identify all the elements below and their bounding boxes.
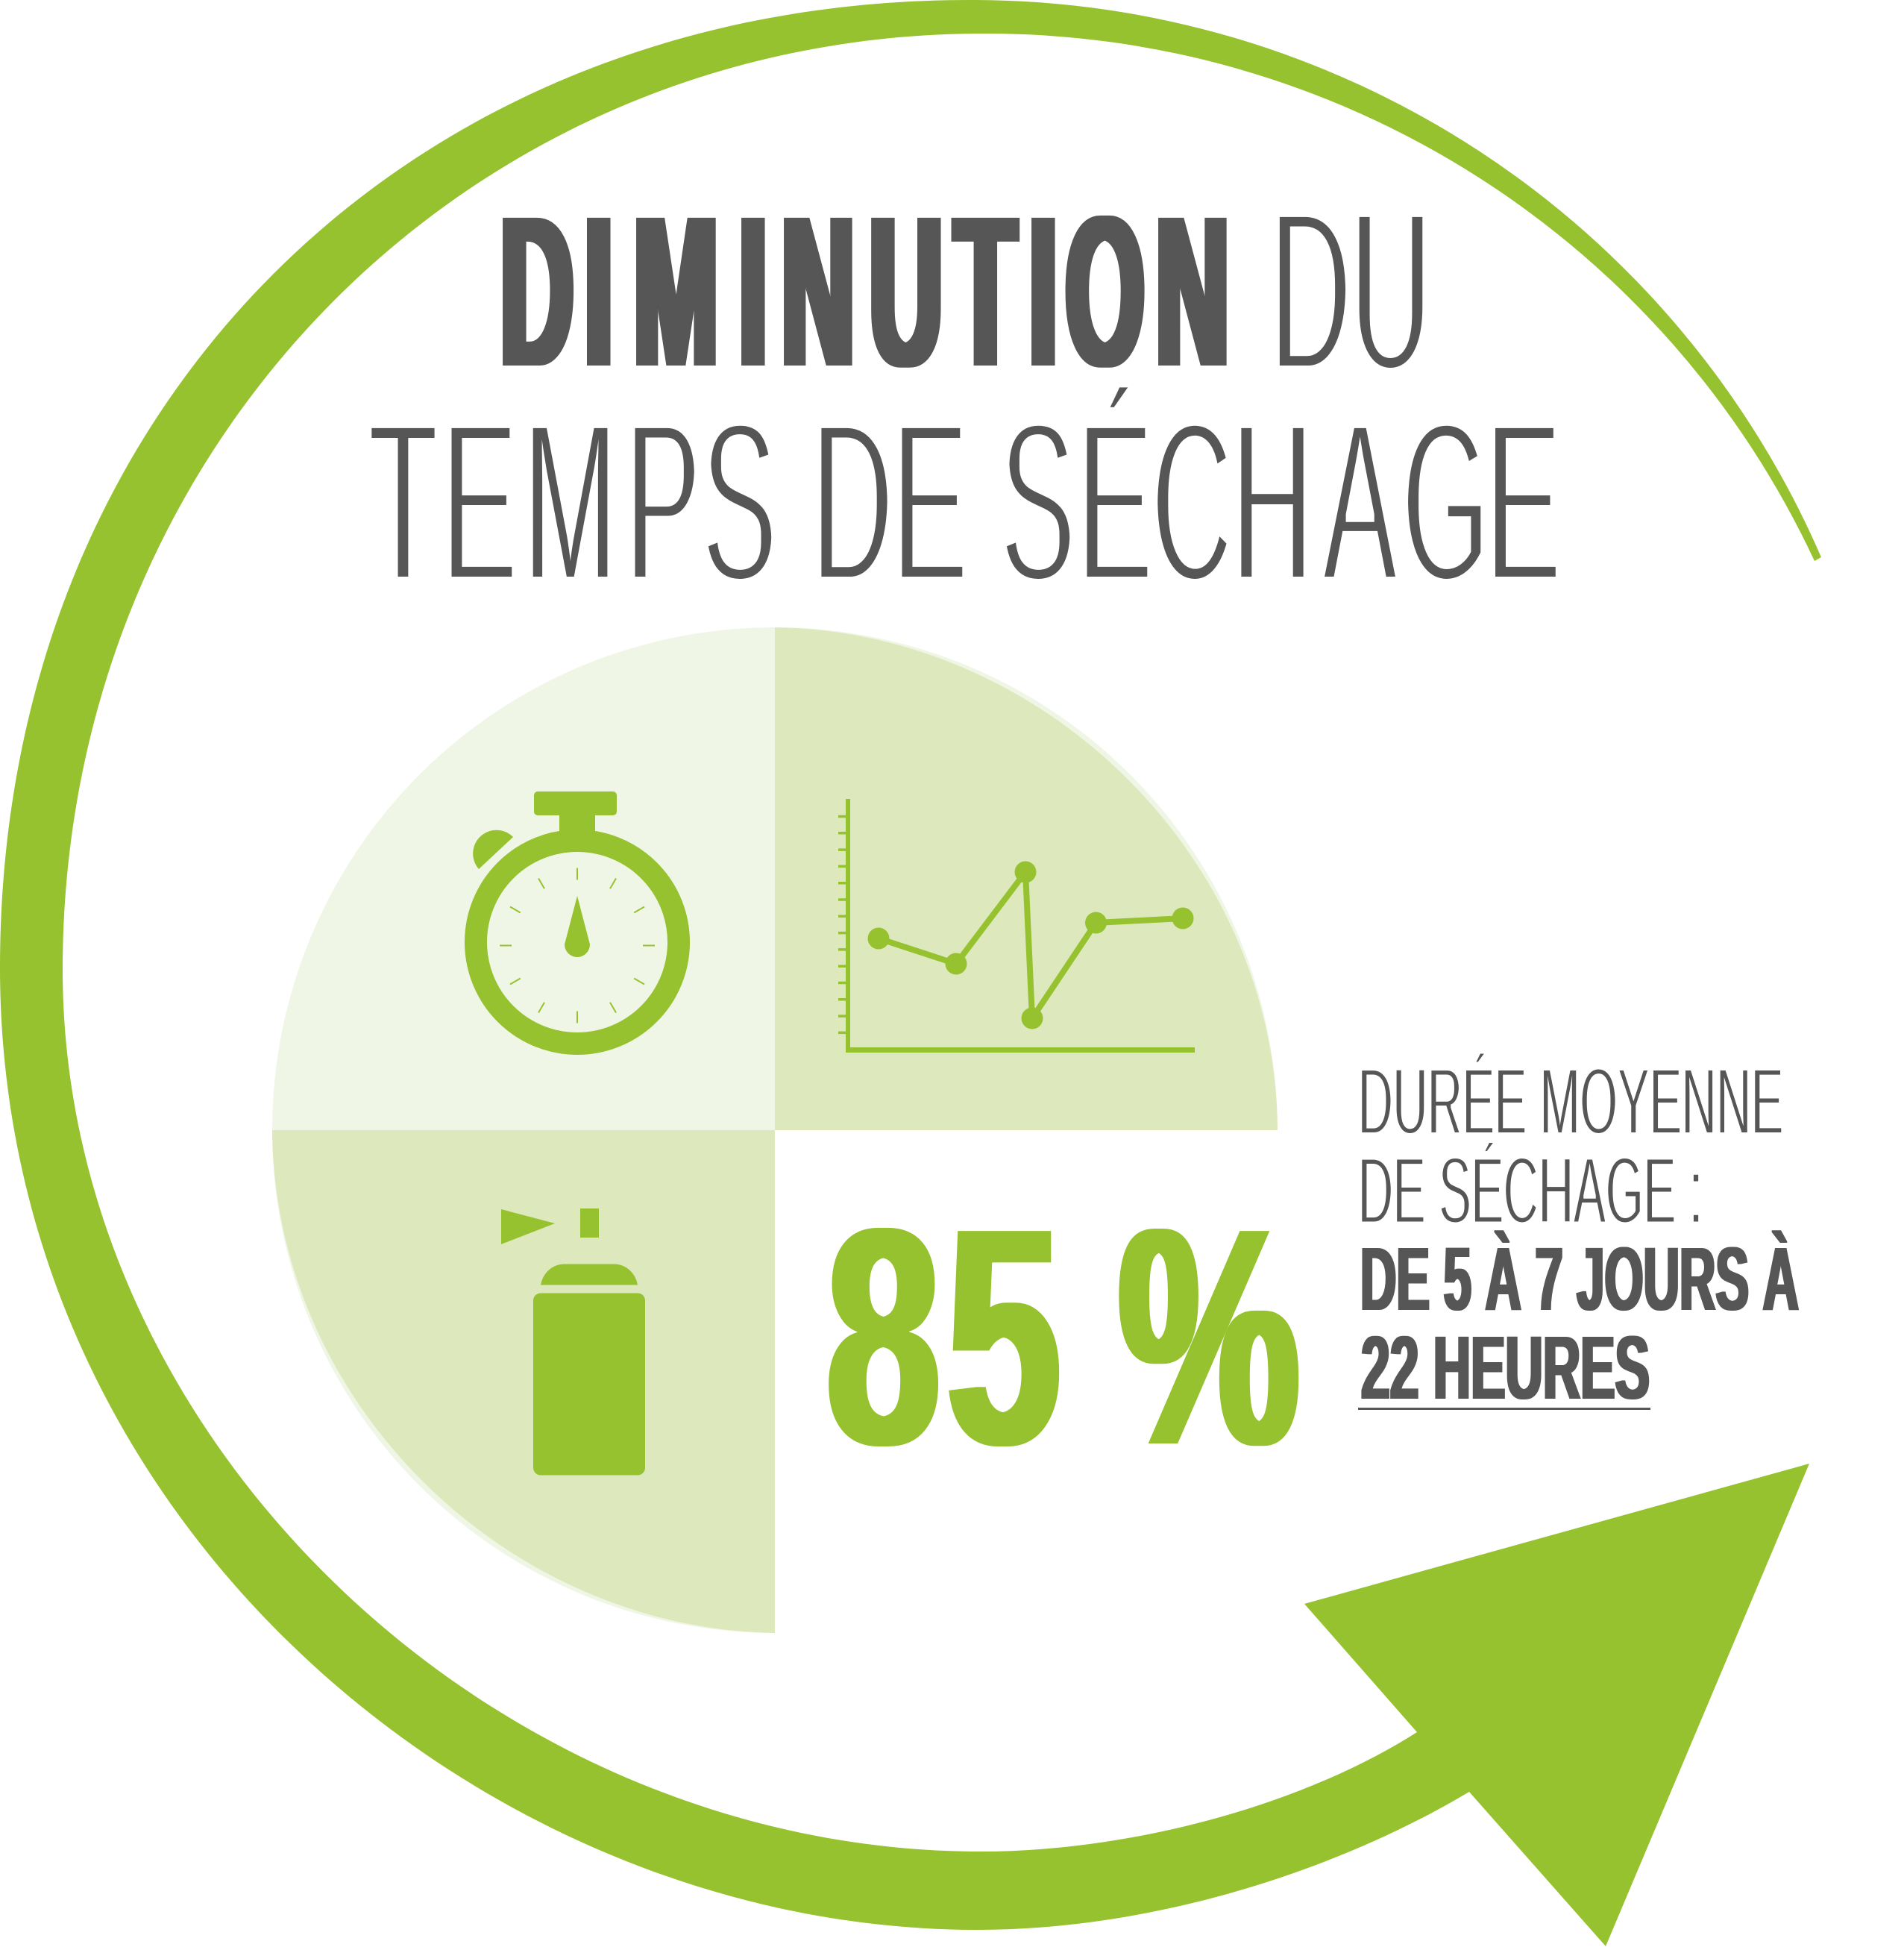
icon: spray can <box>501 1208 645 1476</box>
title bold word: DIMINUTION <box>500 171 1229 411</box>
icon: stopwatch <box>473 791 679 1044</box>
panel: quarter circles <box>272 627 1278 1633</box>
title second line: TEMPS DE SÉCHAGE <box>369 374 1560 629</box>
percentage: 85 %: 85 % <box>826 1164 1299 1510</box>
panel: stopwatch quadrant <box>272 627 775 1130</box>
underline <box>1358 1408 1650 1410</box>
text block: drying time <box>1358 1049 1799 1418</box>
chart: line graph <box>838 799 1195 1053</box>
panel: chart quadrant <box>775 627 1278 1130</box>
title light word: DU <box>1271 163 1431 418</box>
text line: 22 heures: 22 HEURES <box>1361 1317 1650 1418</box>
panel: spray quadrant <box>272 1130 775 1633</box>
title <box>369 163 1560 629</box>
